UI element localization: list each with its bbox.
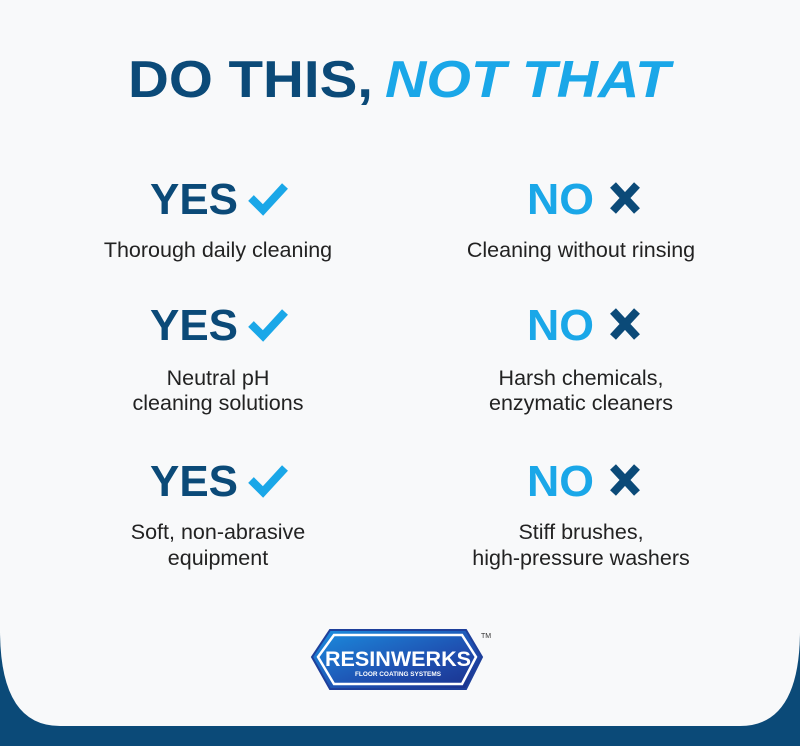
logo: TM [481, 633, 491, 640]
title [128, 51, 675, 109]
yes text 3: Soft, non-abrasive [131, 520, 305, 544]
no heading 2 [527, 301, 637, 350]
no heading 1: NO [527, 175, 594, 224]
no text 3: Stiff brushes, [518, 520, 644, 544]
panel: yes column [104, 175, 332, 570]
no heading 2: NO [527, 301, 594, 350]
logo: RESINWERKS [325, 648, 471, 671]
logo: FLOOR COATING SYSTEMS [355, 672, 441, 678]
yes text 3: equipment [168, 546, 268, 570]
yes text 2: cleaning solutions [133, 391, 303, 415]
yes heading 3: YES [150, 457, 238, 506]
panel: no column [467, 175, 695, 570]
title: DO THIS, [128, 51, 373, 109]
yes text 2: Neutral pH [167, 366, 269, 390]
no text 2: enzymatic cleaners [489, 391, 673, 415]
yes heading 2 [150, 301, 285, 350]
no text 3: high-pressure washers [472, 546, 690, 570]
no text 2: Harsh chemicals, [499, 366, 663, 390]
yes text 1: Thorough daily cleaning [104, 238, 332, 262]
yes heading 2: YES [150, 301, 238, 350]
title: NOT THAT [385, 51, 675, 109]
yes heading 3 [150, 457, 285, 506]
logo [312, 630, 491, 689]
no heading 1 [527, 175, 637, 224]
yes heading 1: YES [150, 175, 238, 224]
no heading 3: NO [527, 457, 594, 506]
no text 1: Cleaning without rinsing [467, 238, 695, 262]
no heading 3 [527, 457, 637, 506]
yes heading 1 [150, 175, 285, 224]
